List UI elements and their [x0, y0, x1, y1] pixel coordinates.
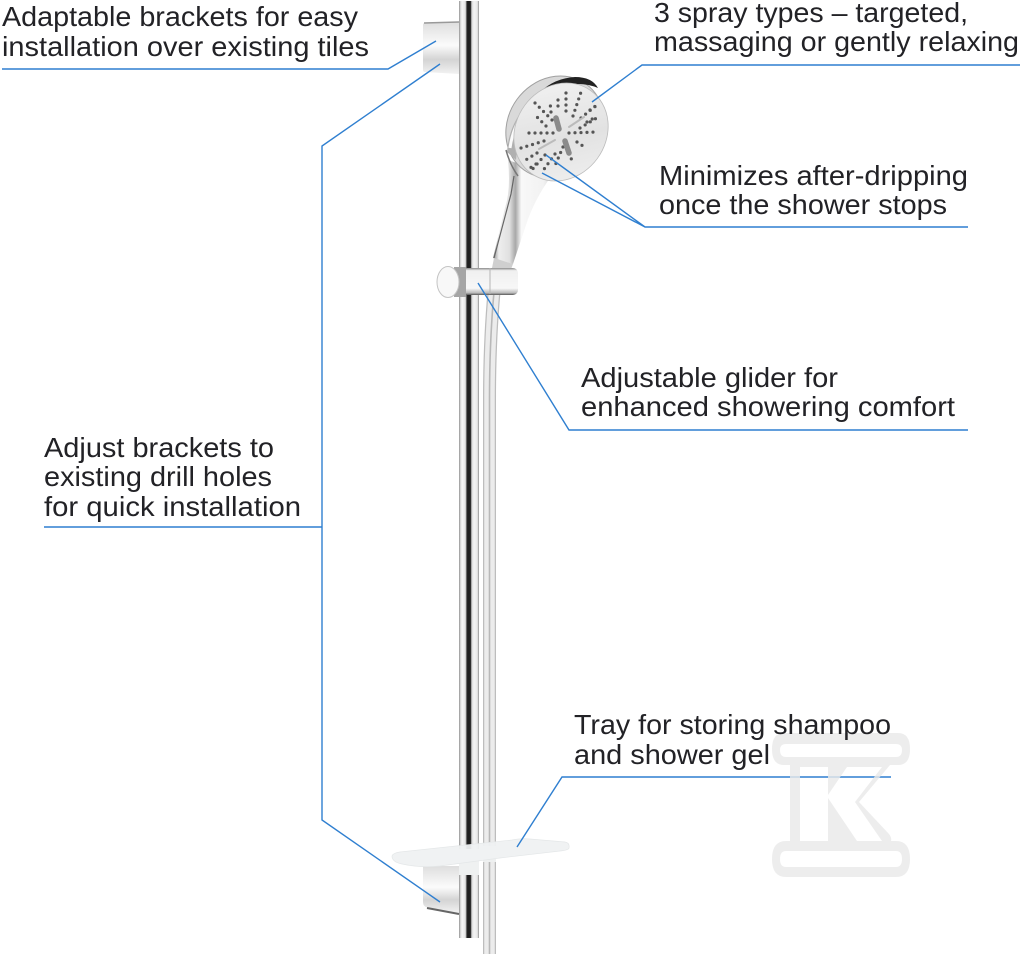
leader: spray types — [592, 65, 1020, 102]
label: adjust brackets: Adjust brackets to — [44, 432, 274, 463]
shower rail — [459, 1, 479, 938]
label: after-dripping: once the shower stops — [659, 189, 947, 220]
leader: adjust brackets — [44, 64, 440, 902]
spray selector slots — [539, 117, 584, 153]
head rim — [486, 56, 624, 198]
label: glider: Adjustable glider for — [581, 362, 838, 393]
leader: tray — [517, 777, 891, 847]
shower hose — [490, 292, 494, 954]
hand shower — [486, 56, 627, 272]
label: after-dripping: Minimizes after-dripping — [659, 160, 968, 191]
head face — [495, 64, 627, 200]
glider — [437, 266, 518, 298]
label: adjust brackets: existing drill holes — [44, 461, 272, 492]
label: adjust brackets: for quick installation — [44, 491, 301, 522]
label: tray: and shower gel — [574, 739, 770, 770]
label: adaptable brackets: installation over existing tiles — [2, 31, 369, 62]
label: spray types: massaging or gently relaxing — [654, 26, 1019, 57]
leader: adaptable brackets — [2, 41, 436, 69]
label: glider: enhanced showering comfort — [581, 391, 955, 422]
label: adaptable brackets: Adaptable brackets for easy — [2, 1, 358, 32]
nozzle rows — [521, 92, 600, 172]
watermark logo — [772, 733, 910, 877]
handle — [493, 160, 552, 264]
leader: after-dripping — [542, 155, 968, 227]
label: tray: Tray for storing shampoo — [574, 709, 891, 740]
leader: glider — [478, 283, 968, 430]
bottom wall bracket — [423, 866, 459, 914]
top wall bracket — [423, 22, 459, 74]
soap tray — [392, 839, 569, 875]
